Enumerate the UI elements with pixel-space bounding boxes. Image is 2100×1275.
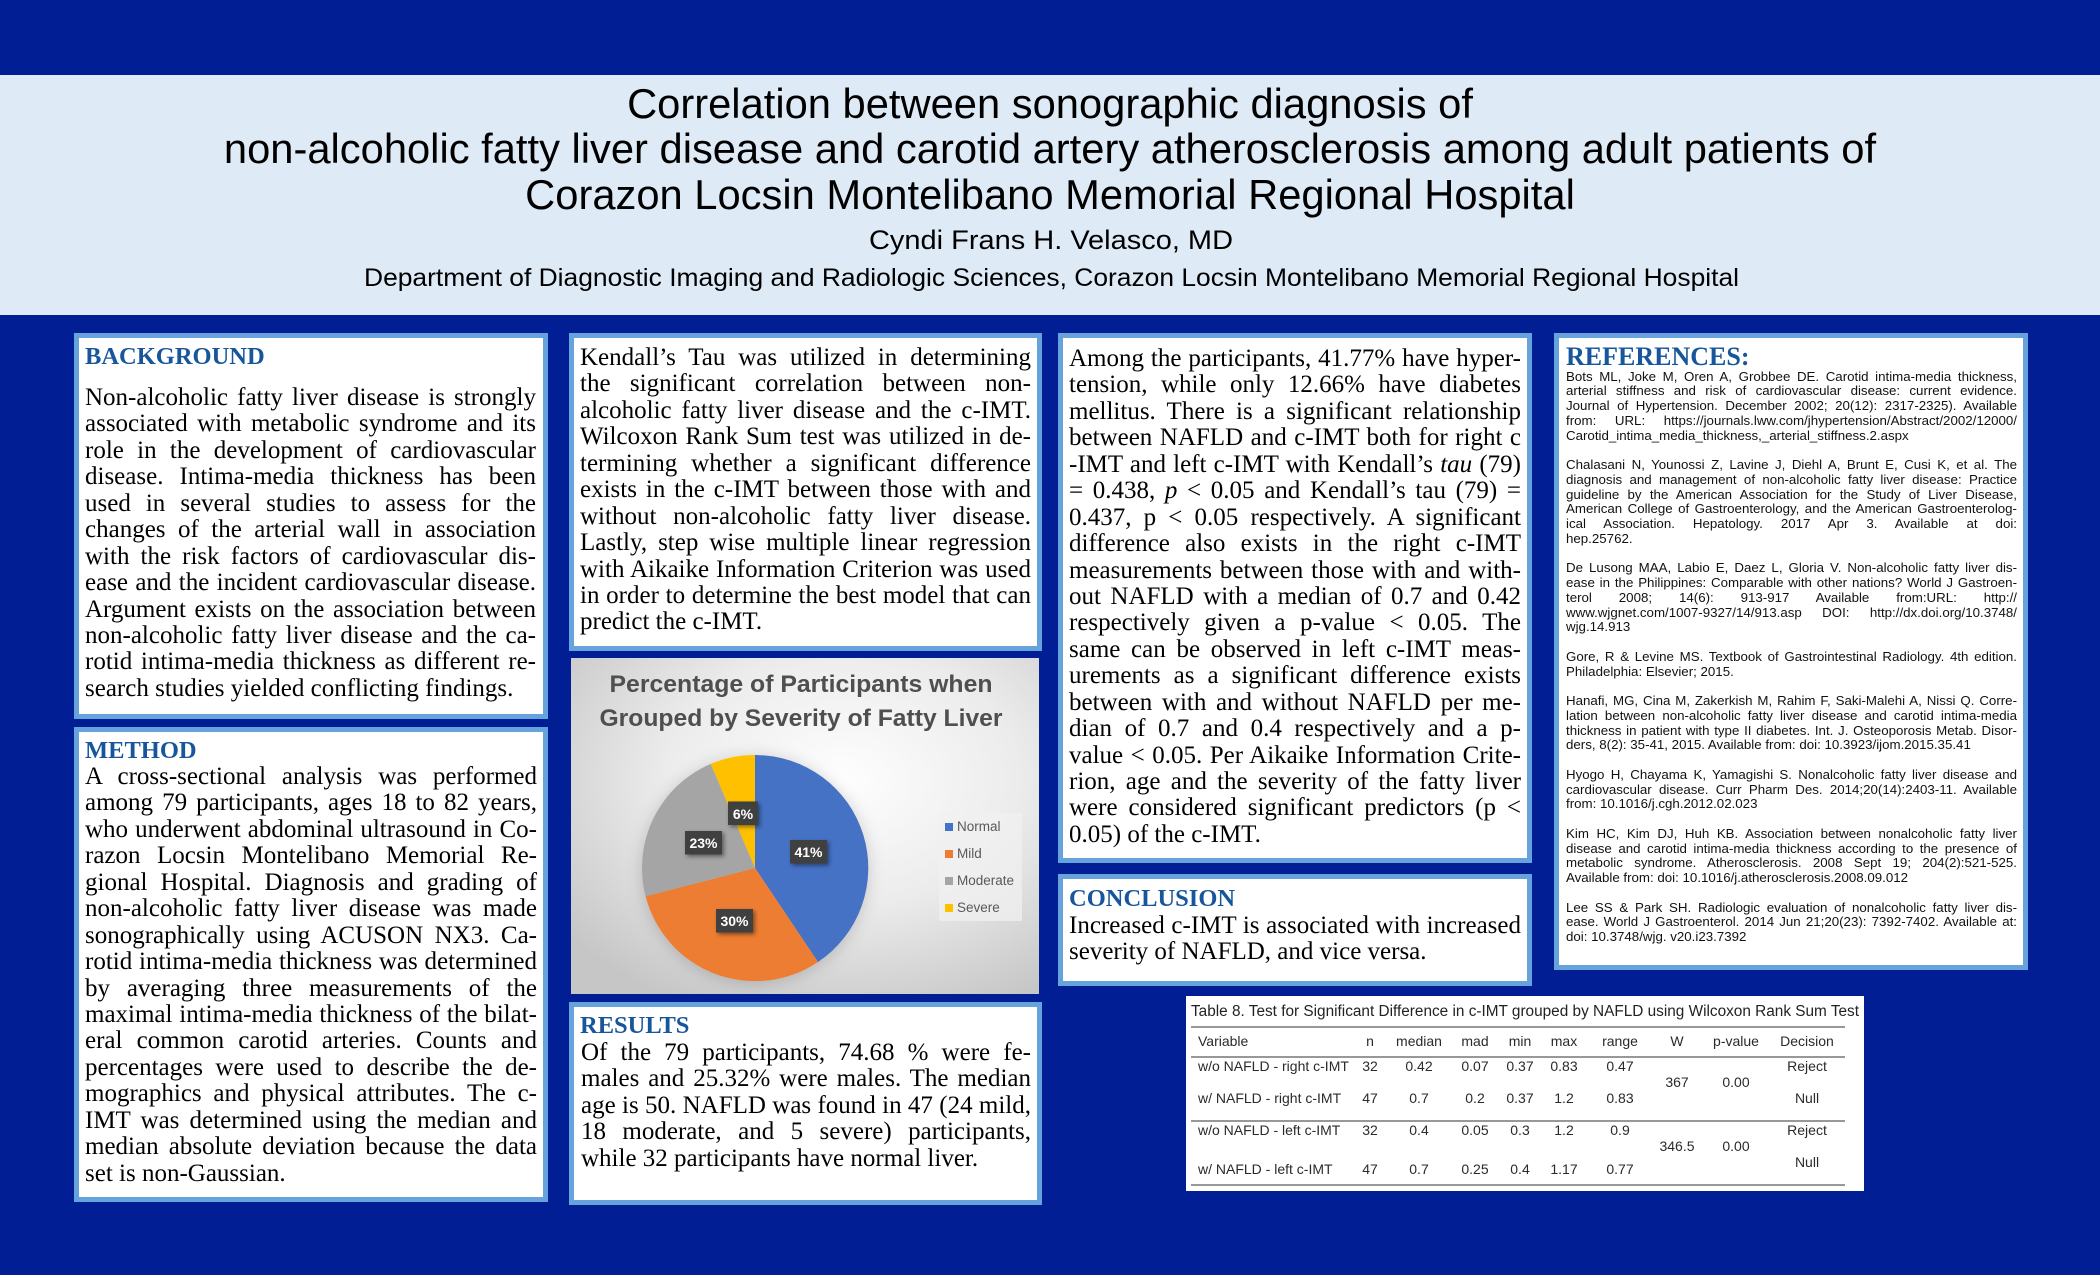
reference list: from: URL: https://journals.lww.com/jhypertension/Abstract/2002/12000/ bbox=[1566, 413, 2017, 428]
reference list: Philadelphia: Elsevier; 2015. bbox=[1566, 664, 1734, 678]
reference list: terol 2008; 14(6): 913-917 Available from:URL: http:// bbox=[1566, 590, 2017, 605]
text: findings: respectively given a p-value < 0.05. The bbox=[1069, 609, 1521, 636]
author and affiliation bbox=[364, 225, 1739, 292]
data labels: 6% bbox=[733, 806, 754, 822]
row: without NAFLD right: Reject bbox=[1787, 1058, 1827, 1074]
row: without NAFLD right: 0.07 bbox=[1461, 1058, 1489, 1074]
text: findings: Among the participants, 41.77% have hyper- bbox=[1069, 345, 1521, 372]
text: method: maximal intima-media thickness of the bilat- bbox=[85, 1001, 537, 1028]
panel: method bbox=[74, 727, 548, 1202]
text: background: search studies yielded conflicting findings. bbox=[85, 675, 513, 702]
text: findings: dian of 0.7 and 0.4 respectively and a p- bbox=[1069, 715, 1521, 742]
text: background: non-alcoholic fatty liver disease and the ca- bbox=[85, 622, 536, 649]
text: statistical analysis: without non-alcoholic fatty liver disease. bbox=[580, 503, 1031, 530]
text: method bbox=[85, 763, 537, 1187]
text: statistical analysis: Lastly, step wise multiple linear regression bbox=[580, 529, 1031, 556]
row: with NAFLD left: 0.7 bbox=[1409, 1161, 1429, 1177]
test statistic right: 0.00 bbox=[1722, 1074, 1750, 1090]
panel: findings bbox=[1058, 333, 1532, 863]
row: without NAFLD left: 32 bbox=[1362, 1122, 1378, 1138]
row: with NAFLD right: 47 bbox=[1362, 1090, 1378, 1106]
reference list: lation between non-alcoholic fatty liver disease and carotid intima-media bbox=[1566, 708, 2017, 723]
title: non-alcoholic fatty liver disease and carotid artery atherosclerosis among adult patients of bbox=[224, 125, 1876, 172]
reference list: hep.25762. bbox=[1566, 531, 1633, 546]
row: with NAFLD left: 0.25 bbox=[1461, 1161, 1489, 1177]
heading: references: REFERENCES: bbox=[1566, 342, 1749, 371]
reference list: ders, 8(2): 35-41, 2015. Available from: doi: 10.3923/ijom.2015.35.41 bbox=[1566, 737, 1971, 752]
reference list: guideline by the American Association for the Study of Liver Disease, bbox=[1566, 486, 2017, 502]
text: statistical analysis: in order to determine the best model that can bbox=[580, 582, 1031, 609]
reference list: cardiovascular disease. Curr Pharm Des. 2014;20(14):2403-11. Available bbox=[1566, 782, 2017, 796]
row: with NAFLD left bbox=[1197, 1154, 1819, 1177]
table header: p-value bbox=[1713, 1033, 1759, 1049]
text: method: IMT was determined using the median and bbox=[85, 1107, 537, 1134]
text: background: role in the development of cardiovascular bbox=[85, 437, 536, 464]
text: method: A cross-sectional analysis was performed bbox=[85, 763, 537, 790]
text: background: Non-alcoholic fatty liver disease is strongly bbox=[85, 384, 536, 411]
row: with NAFLD left: 0.77 bbox=[1606, 1161, 1634, 1177]
reference list: arterial stiffness and risk of cardiovascular disease: current evidence. bbox=[1566, 383, 2017, 398]
text: background: used in several studies to assess for the bbox=[85, 490, 536, 517]
text: findings: difference also exists in the right c-IMT bbox=[1069, 530, 1521, 557]
text: method: eral common carotid arteries. Counts and bbox=[85, 1027, 537, 1054]
text: method: razon Locsin Montelibano Memorial Re- bbox=[85, 842, 537, 869]
header band bbox=[0, 75, 2100, 315]
reference list: Hanafi, MG, Cina M, Zakerkish M, Rahim F, Saki-Malehi A, Nissi Q. Corre- bbox=[1566, 693, 2017, 708]
data labels: 30% bbox=[720, 913, 749, 929]
test statistic left: 0.00 bbox=[1722, 1138, 1750, 1154]
text: background: rotid intima-media thickness as different re- bbox=[85, 648, 536, 675]
reference list: doi: 10.3748/wjg. v20.i23.7392 bbox=[1566, 929, 1746, 944]
legend: Normal bbox=[957, 819, 1001, 834]
table header: min bbox=[1509, 1033, 1531, 1049]
row: with NAFLD left: w/ NAFLD - left c-IMT bbox=[1197, 1161, 1333, 1177]
text: findings: measurements between those with and with- bbox=[1069, 556, 1521, 584]
row: with NAFLD left: 47 bbox=[1362, 1161, 1378, 1177]
text: method: gional Hospital. Diagnosis and grading of bbox=[85, 869, 537, 896]
reference list: ease. World J Gastroenterol. 2014 Jun 21;20(23): 7392-7402. Available at: bbox=[1566, 914, 2017, 929]
pie slices bbox=[642, 755, 868, 981]
chart title bbox=[600, 671, 1003, 732]
heading: method: METHOD bbox=[85, 737, 197, 764]
text: method: by averaging three measurements of the bbox=[85, 974, 537, 1002]
row: with NAFLD left: Null bbox=[1795, 1154, 1819, 1170]
text: method: mographics and physical attributes. The c- bbox=[85, 1080, 537, 1107]
table header: mad bbox=[1461, 1033, 1489, 1049]
text: findings: -IMT and left c-IMT with Kendall’s tau (79) bbox=[1069, 451, 1521, 478]
data labels: 23% bbox=[689, 835, 718, 851]
reference list: thickness in patient with type II diabetes. Int. J. Osteoporosis Metab. Disor- bbox=[1566, 722, 2017, 738]
text: findings: between NAFLD and c-IMT both for right c bbox=[1069, 424, 1521, 451]
text: results bbox=[581, 1039, 1031, 1172]
table header: range bbox=[1602, 1033, 1638, 1049]
legend: Mild bbox=[957, 846, 982, 861]
row: with NAFLD right: 0.83 bbox=[1606, 1090, 1634, 1106]
text: results: males and 25.32% were males. The median bbox=[581, 1065, 1031, 1092]
panel: background bbox=[74, 333, 548, 719]
text: findings: mellitus. There is a significant relationship bbox=[1069, 398, 1521, 425]
row: with NAFLD right: 0.2 bbox=[1465, 1090, 1485, 1106]
data labels bbox=[685, 802, 827, 932]
text: background: associated with metabolic syndrome and its bbox=[85, 410, 536, 437]
text: findings: 0.437, p < 0.05 respectively. A significant bbox=[1069, 504, 1521, 531]
heading: conclusion: CONCLUSION bbox=[1069, 885, 1235, 912]
heading: background: BACKGROUND bbox=[85, 343, 265, 370]
text: findings: between with and without NAFLD per me- bbox=[1069, 689, 1521, 716]
text: method: non-alcoholic fatty liver disease was made bbox=[85, 895, 537, 922]
text: method: who underwent abdominal ultrasound in Co- bbox=[85, 816, 537, 843]
text: statistical analysis: with Aikaike Information Criterion was used bbox=[580, 556, 1031, 582]
row: with NAFLD left: 1.17 bbox=[1550, 1161, 1578, 1177]
table header: median bbox=[1396, 1033, 1442, 1049]
reference list: Hyogo H, Chayama K, Yamagishi S. Nonalcoholic fatty liver disease and bbox=[1566, 767, 2017, 782]
row: without NAFLD right: w/o NAFLD - right c-IMT bbox=[1197, 1058, 1349, 1074]
table caption: Table 8. Test for Significant Difference in c-IMT grouped by NAFLD using Wilcoxon Rank Sum Test bbox=[1191, 1003, 1860, 1020]
text: results: age is 50. NAFLD was found in 47 (24 mild, bbox=[581, 1092, 1031, 1119]
text: background: ease and the incident cardiovascular disease. bbox=[85, 569, 536, 596]
reference list: diagnosis and management of non-alcoholic fatty liver disease: Practice bbox=[1566, 472, 2017, 487]
reference list: Lee SS & Park SH. Radiologic evaluation of nonalcoholic fatty liver dis- bbox=[1566, 900, 2017, 914]
reference list: wjg.14.913 bbox=[1566, 619, 1630, 634]
chart background bbox=[571, 658, 1039, 994]
reference list: Chalasani N, Younossi Z, Lavine J, Diehl A, Brunt E, Cusi K, et al. The bbox=[1566, 457, 2017, 472]
legend: Severe bbox=[957, 900, 1000, 915]
reference list: www.wjgnet.com/1007-9327/14/913.asp DOI: http://dx.doi.org/10.3748/ bbox=[1566, 604, 2017, 620]
test statistic right bbox=[1665, 1074, 1750, 1090]
reference list: metabolic syndrome. Atherosclerosis. 2008 Sept 19; 204(2):521-525. bbox=[1566, 855, 2017, 870]
row: without NAFLD right: 0.42 bbox=[1405, 1058, 1433, 1074]
title: Correlation between sonographic diagnosis of bbox=[627, 80, 1473, 127]
text: statistical analysis: termining whether a significant difference bbox=[580, 450, 1031, 477]
table header: n bbox=[1366, 1033, 1374, 1049]
text: background: disease. Intima-media thickness has been bbox=[85, 463, 536, 490]
text: method: rotid intima-media thickness was determined bbox=[85, 948, 537, 975]
table header bbox=[1198, 1033, 1834, 1049]
row: without NAFLD right: 0.83 bbox=[1550, 1058, 1578, 1074]
reference list: De Lusong MAA, Labio E, Daez L, Gloria V. Non-alcoholic fatty liver dis- bbox=[1566, 560, 2017, 575]
chart title: Grouped by Severity of Fatty Liver bbox=[600, 705, 1003, 732]
text: background: Argument exists on the association between bbox=[85, 596, 536, 622]
text: background: changes of the arterial wall in association bbox=[85, 516, 536, 543]
chart title: Percentage of Participants when bbox=[610, 671, 992, 698]
row: with NAFLD right: 0.37 bbox=[1506, 1090, 1534, 1106]
text: results: Of the 79 participants, 74.68 % were fe- bbox=[581, 1039, 1031, 1066]
row: without NAFLD left: 0.9 bbox=[1610, 1122, 1630, 1138]
text: method: percentages were used to describe the de- bbox=[85, 1054, 537, 1081]
text: findings: rion, age and the severity of the fatty liver bbox=[1069, 768, 1521, 795]
row: with NAFLD right bbox=[1197, 1090, 1819, 1106]
text: findings: urements as a significant difference exists bbox=[1069, 662, 1521, 689]
reference list: Gore, R & Levine MS. Textbook of Gastrointestinal Radiology. 4th edition. bbox=[1566, 649, 2017, 664]
text: findings: same can be observed in left c-IMT meas- bbox=[1069, 636, 1521, 663]
reference list: ical Association. Hepatology. 2017 Apr 3. Available at doi: bbox=[1566, 516, 2017, 531]
text: findings bbox=[1069, 345, 1521, 848]
text: statistical analysis bbox=[580, 344, 1031, 635]
text: statistical analysis: Wilcoxon Rank Sum test was utilized in de- bbox=[580, 423, 1031, 450]
row: without NAFLD left: Reject bbox=[1787, 1122, 1827, 1138]
text: findings: out NAFLD with a median of 0.7 and 0.42 bbox=[1069, 583, 1521, 610]
text: findings: = 0.438, p < 0.05 and Kendall’s tau (79) = bbox=[1069, 477, 1521, 504]
legend: Moderate bbox=[957, 873, 1014, 888]
row: without NAFLD left bbox=[1197, 1122, 1827, 1138]
text: results: while 32 participants have normal liver. bbox=[581, 1145, 978, 1172]
reference list: Available from: doi: 10.1016/j.atherosclerosis.2008.09.012 bbox=[1566, 870, 1908, 885]
text: method: sonographically using ACUSON NX3. Ca- bbox=[85, 922, 537, 949]
legend bbox=[939, 813, 1022, 921]
reference list: Carotid_intima_media_thickness,_arterial_stiffness.2.aspx bbox=[1566, 428, 1909, 442]
row: without NAFLD right bbox=[1197, 1058, 1827, 1074]
table header: Decision bbox=[1780, 1033, 1834, 1049]
text: statistical analysis: alcoholic fatty liver disease and the c-IMT. bbox=[580, 397, 1031, 424]
test statistic right: 367 bbox=[1665, 1074, 1689, 1090]
row: without NAFLD left: 0.05 bbox=[1461, 1122, 1489, 1138]
row: without NAFLD left: 1.2 bbox=[1554, 1122, 1574, 1138]
text: findings: tension, while only 12.66% have diabetes bbox=[1069, 371, 1521, 398]
author and affiliation: Cyndi Frans H. Velasco, MD bbox=[869, 225, 1233, 255]
table 8: Wilcoxon rank sum test bbox=[1186, 996, 1864, 1191]
row: with NAFLD right: 0.7 bbox=[1409, 1090, 1429, 1106]
reference list: American College of Gastroenterology, and the American Gastroenterolog- bbox=[1566, 501, 2017, 516]
reference list: Bots ML, Joke M, Oren A, Grobbee DE. Carotid intima-media thickness, bbox=[1566, 368, 2017, 384]
text: findings: value < 0.05. Per Aikaike Information Crite- bbox=[1069, 742, 1521, 769]
panel: conclusion bbox=[1058, 874, 1532, 986]
row: with NAFLD right: w/ NAFLD - right c-IMT bbox=[1197, 1090, 1342, 1106]
reference list bbox=[1566, 368, 2018, 944]
reference list: Journal of Hypertension. December 2002; 20(12): 2317-2325). Available bbox=[1566, 398, 2017, 413]
text: conclusion bbox=[1069, 912, 1521, 965]
test statistic left bbox=[1659, 1138, 1750, 1154]
text: conclusion: Increased c-IMT is associated with increased bbox=[1069, 912, 1521, 939]
text: background bbox=[85, 384, 536, 702]
panel: statistical analysis bbox=[569, 333, 1042, 651]
title bbox=[224, 80, 1876, 218]
table header: Variable bbox=[1198, 1033, 1249, 1049]
row: without NAFLD left: w/o NAFLD - left c-IMT bbox=[1197, 1122, 1341, 1138]
text: statistical analysis: exists in the c-IMT between those with and bbox=[580, 476, 1031, 503]
author and affiliation: Department of Diagnostic Imaging and Radiologic Sciences, Corazon Locsin Montelibano Memorial Regional Hospital bbox=[364, 264, 1739, 292]
reference list: ease in the Philippines: Comparable with other nations? World J Gastroen- bbox=[1566, 575, 2017, 590]
reference list: Kim HC, Kim DJ, Huh KB. Association between nonalcoholic fatty liver bbox=[1566, 826, 2017, 841]
text: conclusion: severity of NAFLD, and vice versa. bbox=[1069, 938, 1427, 965]
row: without NAFLD right: 0.47 bbox=[1606, 1058, 1634, 1074]
row: without NAFLD right: 32 bbox=[1362, 1058, 1378, 1074]
row: with NAFLD right: 1.2 bbox=[1554, 1090, 1574, 1106]
text: findings: were considered significant predictors (p < bbox=[1069, 794, 1521, 821]
panel: references bbox=[1554, 333, 2028, 970]
reference list: from: 10.1016/j.cgh.2012.02.023 bbox=[1566, 796, 1757, 811]
heading: results: RESULTS bbox=[580, 1012, 689, 1039]
table header: max bbox=[1551, 1033, 1577, 1049]
text: statistical analysis: predict the c-IMT. bbox=[580, 608, 762, 635]
row: with NAFLD left: 0.4 bbox=[1510, 1161, 1530, 1177]
title: Corazon Locsin Montelibano Memorial Regional Hospital bbox=[525, 171, 1575, 218]
row: with NAFLD right: Null bbox=[1795, 1090, 1819, 1106]
text: findings: 0.05) of the c-IMT. bbox=[1069, 821, 1261, 848]
text: background: with the risk factors of cardiovascular dis- bbox=[85, 543, 536, 570]
text: method: set is non-Gaussian. bbox=[85, 1160, 286, 1187]
text: method: median absolute deviation because the data bbox=[85, 1133, 537, 1160]
text: statistical analysis: the significant correlation between non- bbox=[580, 370, 1031, 397]
data labels: 41% bbox=[794, 844, 823, 860]
pie chart: severity of fatty liver bbox=[571, 658, 1039, 994]
test statistic left: 346.5 bbox=[1659, 1138, 1695, 1154]
text: results: 18 moderate, and 5 severe) participants, bbox=[581, 1118, 1031, 1145]
table header: W bbox=[1670, 1033, 1684, 1049]
text: statistical analysis: Kendall’s Tau was utilized in determining bbox=[580, 344, 1031, 371]
panel: results bbox=[569, 1002, 1042, 1205]
row: without NAFLD right: 0.37 bbox=[1506, 1058, 1534, 1074]
row: without NAFLD left: 0.3 bbox=[1510, 1122, 1530, 1138]
reference list: disease and carotid intima-media thickness according to the presence of bbox=[1566, 840, 2017, 856]
row: without NAFLD left: 0.4 bbox=[1409, 1122, 1429, 1138]
text: method: among 79 participants, ages 18 to 82 years, bbox=[85, 789, 537, 816]
